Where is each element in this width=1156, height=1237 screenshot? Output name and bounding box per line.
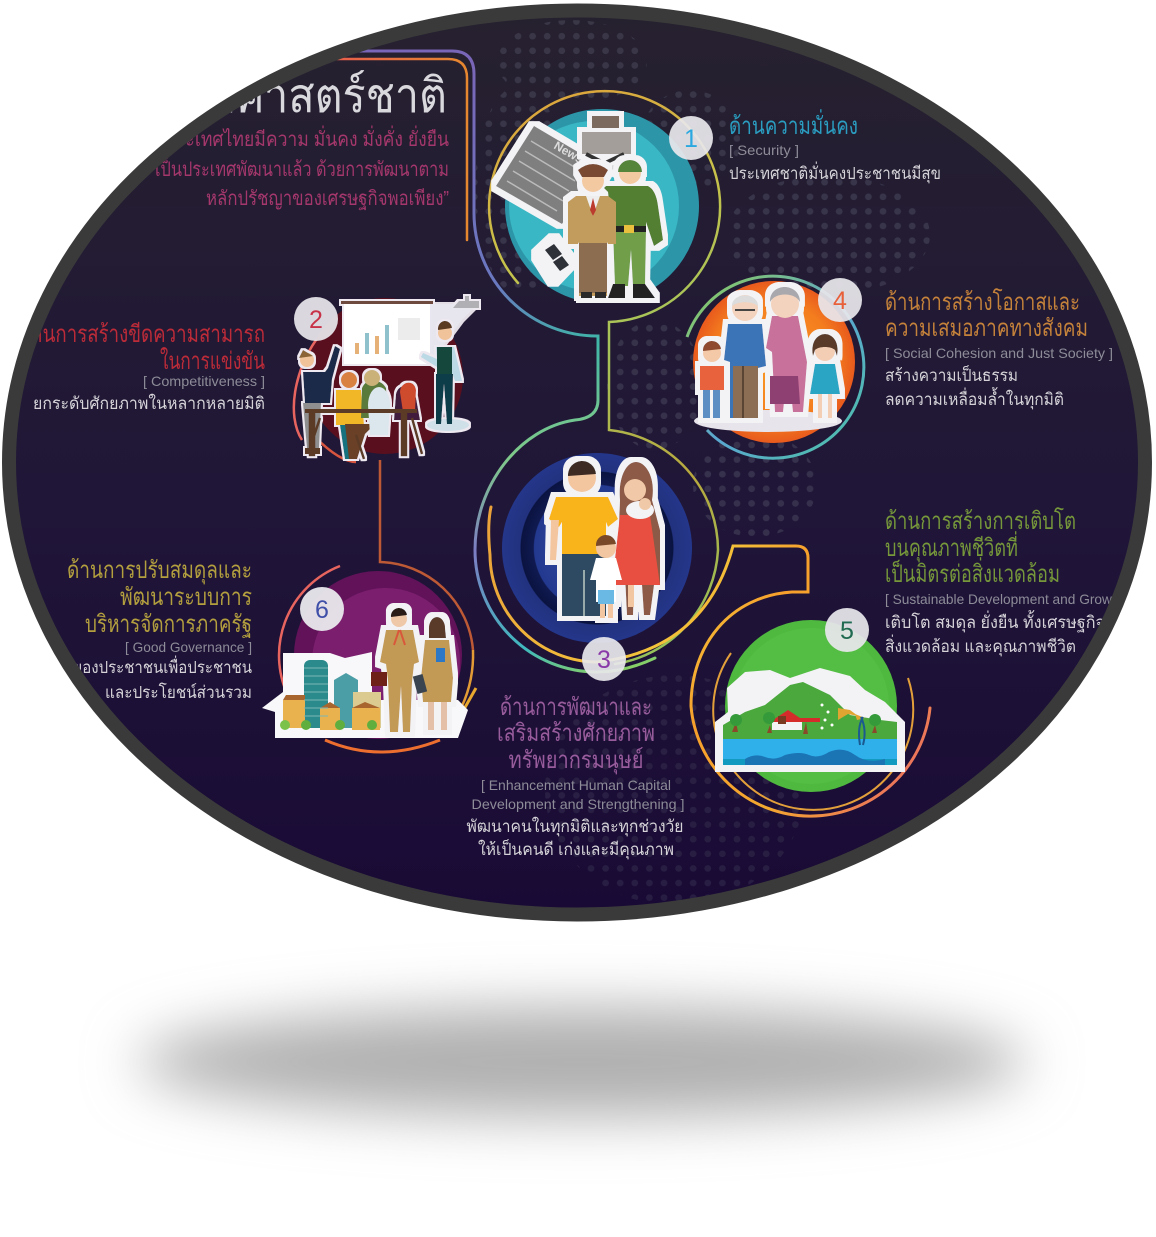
connector 2 to 6	[279, 460, 476, 752]
panel: 6 governance illustration	[262, 571, 468, 739]
english label: [ Enhancement Human Capital	[481, 777, 671, 793]
panel: 4 social text	[818, 278, 1113, 410]
icon: newspaper and binoculars	[496, 126, 600, 282]
number badge 2: 2	[309, 306, 323, 334]
heading	[885, 507, 1076, 588]
heading: ความเสมอภาคทางสังคม	[885, 315, 1088, 342]
heading: ด้านการสร้างโอกาสและ	[885, 288, 1080, 316]
family	[549, 461, 660, 618]
platform	[694, 410, 842, 432]
heading: ในการแข่งขัน	[160, 347, 265, 375]
screen and chart	[341, 296, 479, 364]
description: ประเทศชาติมั่นคงประชาชนมีสุข	[729, 161, 941, 184]
english label	[472, 777, 684, 812]
number badge 2	[294, 297, 338, 341]
briefcases	[371, 648, 445, 694]
description	[76, 656, 252, 698]
description	[885, 364, 1064, 410]
vision statement: เป็นประเทศพัฒนาแล้ว ด้วยการพัฒนาตาม	[155, 156, 449, 181]
description	[466, 816, 684, 860]
vision statement	[155, 125, 449, 210]
heading	[497, 694, 655, 775]
heading: ด้านการปรับสมดุลและ	[67, 557, 252, 585]
icon: watch tower	[582, 116, 631, 172]
description: เติบโต สมดุล ยั่งยืน ทั้งเศรษฐกิจ	[885, 610, 1105, 633]
vision statement: หลักปรัชญาของเศรษฐกิจพอเพียง”	[206, 188, 449, 210]
description: และประโยชน์ส่วนรวม	[105, 682, 252, 702]
description: ของประชาชนเพื่อประชาชน	[72, 655, 252, 677]
civil servants	[380, 608, 453, 732]
number badge 6	[300, 587, 344, 631]
number badge 1	[669, 116, 713, 160]
presenter	[421, 321, 469, 431]
panel: 5 sustainable text	[825, 507, 1131, 657]
description: ให้เป็นคนดี เก่งและมีคุณภาพ	[478, 838, 674, 860]
panel: 3 human capital text	[466, 637, 684, 860]
number badge 5	[825, 608, 869, 652]
white sticker base	[262, 652, 468, 738]
english label: [ Social Cohesion and Just Society ]	[885, 345, 1113, 361]
purple disc	[294, 571, 462, 739]
description: ลดความเหลื่อมล้ำในทุกมิติ	[885, 387, 1064, 410]
main ellipse panel	[6, 8, 1148, 918]
heading	[885, 288, 1088, 342]
english label: [ Sustainable Development and Growth ]	[885, 591, 1131, 607]
ring	[294, 340, 316, 440]
floating shadow under the ellipse	[137, 1007, 1027, 1117]
description: ยกระดับศักยภาพในหลากหลายมิติ	[33, 393, 265, 413]
number badge 3: 3	[597, 646, 611, 674]
ring	[687, 276, 864, 458]
heading: เป็นมิตรต่อสิ่งแวดล้อม	[885, 557, 1060, 588]
heading: บริหารจัดการภาครัฐ	[85, 611, 252, 638]
heading: ด้านความมั่นคง	[729, 109, 858, 140]
description: สร้างความเป็นธรรม	[885, 364, 1018, 385]
description: พัฒนาคนในทุกมิติและทุกช่วงวัย	[466, 816, 684, 837]
english label: Development and Strengthening ]	[472, 796, 684, 812]
connector lines	[300, 51, 930, 816]
vision statement: “ประเทศไทยมีความ มั่นคง มั่งคั่ง ยั่งยืน	[159, 125, 449, 151]
panel: 2 competitiveness illustration	[294, 296, 479, 462]
panel: 5 sustainable illustration	[713, 620, 913, 810]
heading: บนคุณภาพชีวิตที่	[885, 531, 1018, 563]
number badge 4: 4	[833, 287, 847, 315]
ellipse border	[9, 10, 1145, 914]
panel: 3 human capital illustration	[502, 453, 692, 643]
panel: 1 security text	[669, 109, 941, 184]
number badge 5: 5	[840, 617, 854, 645]
panel: 1 security illustration: News	[552, 138, 586, 166]
heading: เสริมสร้างศักยภาพ	[497, 720, 655, 747]
panel: 2 competitiveness text	[20, 297, 338, 413]
landscape sticker	[715, 668, 905, 772]
description: สิ่งแวดล้อม และคุณภาพชีวิต	[885, 634, 1076, 657]
disc	[505, 109, 699, 303]
panel: 6 governance text	[67, 557, 344, 702]
number badge 3	[582, 637, 626, 681]
elderly couple and grandchildren	[700, 287, 840, 418]
maroon disc	[307, 298, 463, 454]
heading: ด้านการสร้างการเติบโต	[885, 507, 1076, 535]
number badge 1: 1	[684, 125, 698, 153]
english label: [ Competitiveness ]	[143, 373, 265, 389]
heading: ด้านการพัฒนาและ	[500, 694, 652, 721]
heading	[20, 321, 265, 375]
title: ยุทธศาสตร์ชาติ	[157, 70, 447, 125]
meeting group	[299, 346, 422, 459]
heading	[67, 557, 252, 638]
description	[885, 610, 1105, 657]
panel: vision title	[155, 70, 449, 210]
green disc	[725, 620, 897, 792]
buildings	[280, 660, 381, 730]
heading: ด้านการสร้างขีดความสามารถ	[20, 321, 265, 348]
orange disc	[693, 281, 855, 443]
heading: ทรัพยากรมนุษย์	[508, 746, 644, 775]
panel: 4 social illustration	[687, 276, 864, 458]
blue disc	[502, 453, 692, 643]
icon: officer and soldier	[568, 160, 663, 298]
number badge 4	[818, 278, 862, 322]
english label: [ Security ]	[729, 142, 799, 158]
panel: 1 security illustration	[496, 109, 699, 303]
heading: พัฒนาระบบการ	[120, 584, 252, 611]
number badge 6: 6	[315, 596, 329, 624]
english label: [ Good Governance ]	[125, 639, 252, 655]
inner arc	[713, 653, 913, 810]
